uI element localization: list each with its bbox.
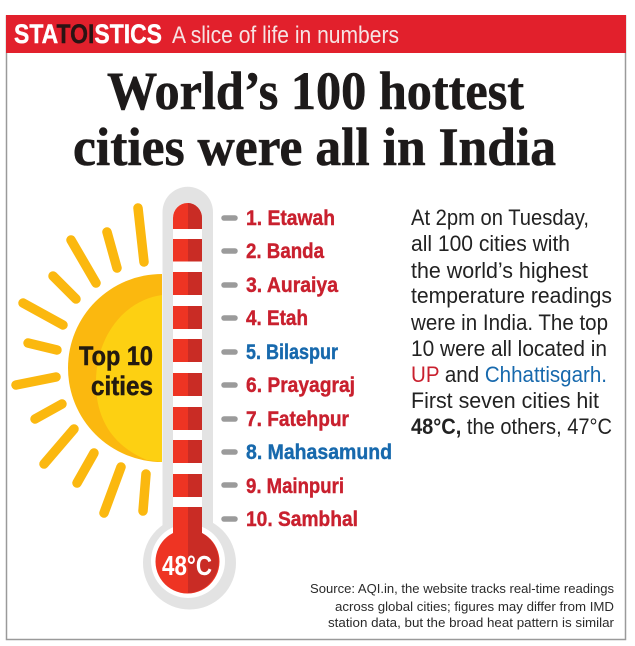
source note: across global cities; figures may differ from IMD	[335, 599, 614, 614]
source note	[310, 581, 615, 630]
description text: At 2pm on Tuesday,	[411, 205, 589, 230]
thermometer bulb casing	[143, 516, 236, 610]
icon: sun	[16, 208, 162, 513]
city ranking list: 7. Fatehpur	[246, 407, 350, 431]
thermometer segments	[156, 203, 220, 594]
description text: First seven cities hit	[411, 388, 599, 413]
thermometer casing	[162, 187, 213, 530]
thermometer reading: 48°C	[162, 550, 212, 581]
sun label: Top 10	[79, 341, 153, 371]
header banner: A slice of life in numbers	[172, 22, 399, 49]
description text: were in India. The top	[410, 310, 608, 335]
city ranking list: 2. Banda	[246, 239, 325, 263]
source note: Source: AQI.in, the website tracks real-time readings	[310, 581, 614, 596]
sun label	[79, 341, 153, 401]
city ranking list: 1. Etawah	[246, 206, 335, 230]
title	[73, 61, 556, 177]
title: cities were all in India	[73, 117, 556, 177]
header banner	[6, 15, 626, 53]
description text: 48°C, the others, 47°C	[411, 414, 612, 439]
thermometer bulb white	[151, 524, 225, 598]
city ranking list: 6. Prayagraj	[246, 373, 355, 397]
description text: UP and Chhattisgarh.	[411, 362, 607, 387]
description text	[410, 205, 612, 439]
sun disc	[68, 274, 162, 462]
city ranking list: 10. Sambhal	[246, 507, 358, 531]
city ranking list: 3. Auraiya	[246, 273, 339, 297]
description text: the world’s highest	[411, 258, 588, 283]
city ranking list: 4. Etah	[246, 306, 308, 330]
thermometer shading	[188, 203, 219, 593]
scale ticks	[224, 218, 235, 519]
icon: thermometer	[143, 187, 236, 610]
city ranking list: 8. Mahasamund	[246, 440, 392, 464]
city ranking list: 9. Mainpuri	[246, 474, 344, 498]
thermometer inner white	[173, 203, 202, 530]
description text: temperature readings	[411, 283, 612, 308]
description text: all 100 cities with	[411, 231, 570, 256]
source note: station data, but the broad heat pattern is similar	[328, 615, 615, 630]
sun inner highlight	[96, 295, 162, 462]
sun rays	[16, 208, 146, 513]
title: World’s 100 hottest	[107, 61, 524, 121]
header banner: STATOISTICS	[14, 19, 162, 49]
city ranking list: 5. Bilaspur	[246, 340, 339, 364]
city ranking list	[246, 206, 392, 531]
sun label: cities	[91, 371, 153, 401]
description text: 10 were all located in	[411, 336, 607, 361]
